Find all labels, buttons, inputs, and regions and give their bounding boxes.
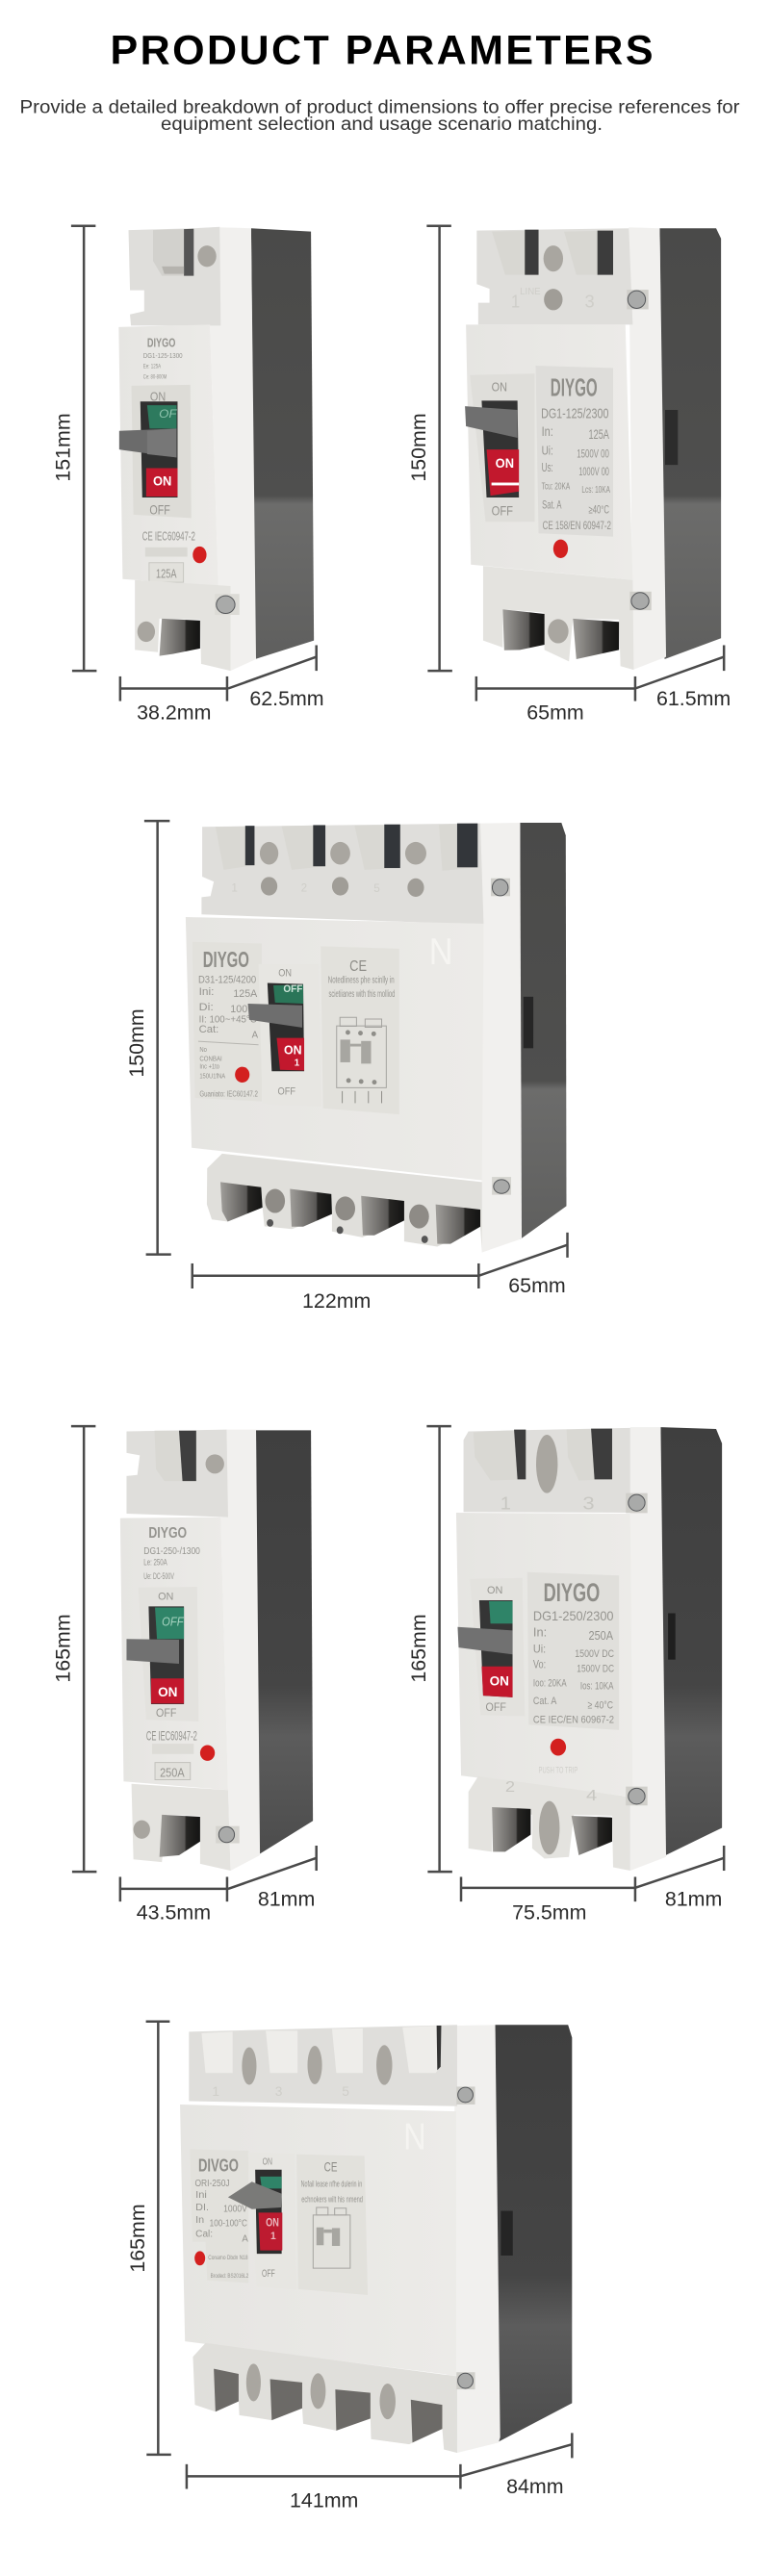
breaker: 1-pole 125A	[118, 227, 314, 671]
dimension: 81mm depth	[635, 1846, 724, 1888]
breaker: 2-pole 250A: 3	[582, 1492, 595, 1513]
nameplate: Ios: 10KA	[580, 1680, 614, 1692]
dimension: 150mm height	[144, 821, 171, 1255]
nameplate: DIYGO	[544, 1579, 600, 1608]
breaker: 2-pole 250A: 1	[500, 1492, 511, 1513]
switch: OFF	[162, 1616, 185, 1629]
left nameplate	[190, 2149, 249, 2283]
nameplate text: DIYGO	[148, 1524, 187, 1542]
right nameplate with wiring diagram	[321, 946, 399, 1114]
breaker: 2-pole 250A	[456, 1427, 722, 1871]
left nameplate: DI.	[195, 2203, 209, 2213]
switch	[465, 373, 534, 522]
nameplate: Ioo: 20KA	[533, 1677, 567, 1689]
dimension: 84mm depth	[460, 2433, 572, 2476]
switch: 1	[295, 1058, 300, 1069]
nameplate: In:	[542, 423, 553, 439]
left nameplate: 100-100°C	[210, 2218, 247, 2230]
left nameplate: No	[199, 1047, 207, 1054]
nameplate: DIYGO	[551, 373, 598, 401]
dimension: 150mm height	[426, 226, 452, 671]
nameplate: Ui:	[533, 1643, 546, 1656]
left nameplate: 150U1fNA	[199, 1073, 225, 1080]
left nameplate: 1000V	[223, 2204, 247, 2214]
switch	[228, 2153, 296, 2290]
labels: row 2 dimensions	[125, 1008, 566, 1313]
left nameplate: Guaniato: IEC60147.2	[199, 1089, 258, 1099]
switch	[457, 1578, 525, 1717]
left nameplate: Ini	[195, 2190, 207, 2201]
left nameplate: 100	[230, 1004, 247, 1015]
nameplate	[535, 366, 613, 537]
breaker: 1-pole 250A: CE IEC60947-2	[146, 1728, 197, 1744]
nameplate	[527, 1572, 619, 1730]
nameplate: Lcs: 10KA	[581, 485, 610, 496]
left nameplate: Cat:	[199, 1024, 218, 1035]
left nameplate: DIYGO	[203, 946, 249, 972]
labels: row 3 dimensions: 43.5mm	[137, 1901, 211, 1925]
labels: row 3 dimensions: 81mm	[665, 1887, 722, 1910]
subtitle text: Provide a detailed breakdown of product dimensions to offer precise references for	[19, 96, 740, 117]
labels: row 3 dimensions: 165mm	[51, 1614, 74, 1683]
dimension: 122mm width	[192, 1263, 478, 1288]
dimension: 61.5mm depth	[635, 645, 724, 688]
nameplate text: 250A	[160, 1767, 185, 1780]
breaker: 2-pole 250A: 4	[586, 1787, 597, 1804]
breaker: 2-pole 125A: LINE	[520, 287, 541, 297]
nameplate: 250A	[589, 1629, 613, 1643]
switch: ON	[158, 1685, 177, 1699]
right nameplate with wiring diagram: scietiianes with this molliod	[328, 989, 395, 1000]
nameplate text: DG1-125-1300	[143, 351, 183, 360]
nameplate: DG1-250/2300	[533, 1608, 614, 1623]
switch: ON	[278, 968, 292, 980]
right nameplate with wiring diagram: Notedliness phe scinlly in	[328, 975, 395, 986]
nameplate: Vo:	[533, 1658, 546, 1671]
nameplate: Sat. A	[542, 498, 562, 512]
dimension: 65mm depth	[478, 1233, 568, 1276]
breaker: 4-pole 125A	[186, 823, 566, 1253]
switch: OFF	[262, 2268, 275, 2280]
nameplate text: 125A	[156, 567, 177, 580]
breaker: 4-pole 125A: 2	[301, 880, 307, 894]
nameplate text	[143, 1524, 200, 1780]
breaker: 2-pole 250A: 2	[505, 1778, 515, 1796]
nameplate: ≥ 40°C	[588, 1698, 613, 1711]
labels: row 1 dimensions: 150mm	[407, 413, 430, 482]
nameplate: CE 158/EN 60947-2	[543, 519, 611, 532]
nameplate: CE IEC/EN 60967-2	[533, 1713, 614, 1725]
left nameplate: D31-125/4200	[198, 974, 256, 986]
switch: ON	[496, 455, 514, 471]
nameplate: DG1-125/2300	[541, 407, 608, 422]
labels: row 1 dimensions	[51, 413, 731, 725]
nameplate: Ui:	[542, 444, 553, 457]
switch	[119, 385, 192, 518]
nameplate: Us:	[542, 460, 553, 474]
labels: row 3 dimensions: 165mm	[407, 1614, 430, 1683]
labels: row 4 dimensions: 165mm	[126, 2204, 149, 2273]
right nameplate with wiring diagram: echnokers wilt his nmend	[301, 2195, 363, 2205]
breaker: 2-pole 125A	[465, 227, 721, 670]
right nameplate with wiring diagram	[296, 2155, 368, 2295]
dimension: 65mm width	[476, 676, 635, 701]
breaker: 2-pole 250A: PUSH TO TRIP	[539, 1766, 578, 1775]
panel: row 4 breaker	[146, 2022, 572, 2489]
breaker: 4-pole 250A: 1	[212, 2083, 219, 2099]
breaker: 4-pole 125A: 5	[373, 881, 380, 895]
labels: row 1 dimensions: 65mm	[526, 701, 584, 725]
switch: ON	[263, 2156, 272, 2167]
left nameplate: ORI-250J	[195, 2179, 230, 2189]
breaker: 4-pole 125A: 1	[231, 880, 238, 894]
nameplate: 1500V 00	[577, 447, 609, 460]
labels: row 3 dimensions	[51, 1614, 722, 1925]
nameplate: 125A	[589, 426, 609, 442]
nameplate text: Ee: 125A	[143, 364, 161, 370]
switch: ON	[492, 380, 507, 395]
switch: OFF	[492, 503, 513, 518]
subtitle text	[19, 96, 740, 135]
nameplate: In:	[533, 1626, 547, 1640]
left nameplate: A	[252, 1030, 259, 1041]
dimension: 151mm height	[71, 226, 96, 671]
switch: ON	[150, 390, 166, 403]
dimension: 81mm depth	[228, 1846, 317, 1889]
switch	[248, 964, 321, 1107]
left nameplate	[192, 942, 262, 1102]
left nameplate: In	[195, 2215, 204, 2226]
nameplate text: DG1-250-/1300	[143, 1545, 200, 1556]
nameplate: 1500V DC	[577, 1662, 614, 1674]
dimension: 165mm height	[71, 1426, 96, 1872]
labels: row 2 dimensions: 65mm	[508, 1274, 566, 1297]
breaker: 4-pole 250A: 5	[342, 2083, 349, 2099]
left nameplate: Inc +1to	[199, 1064, 219, 1071]
nameplate: Tcu: 20KA	[542, 482, 570, 492]
switch: OF	[159, 408, 177, 421]
nameplate text: CE IEC60947-2	[142, 529, 195, 543]
dimension: 165mm height	[146, 2022, 171, 2455]
right nameplate with wiring diagram: CE	[324, 2159, 338, 2175]
nameplate text: Ue: DC-500V	[143, 1572, 174, 1581]
title: PRODUCT PARAMETERS	[110, 27, 653, 73]
nameplate: Cat. A	[533, 1694, 557, 1706]
breaker: 4-pole 250A: N	[403, 2116, 426, 2158]
nameplate: ≥40°C	[589, 503, 609, 516]
labels: row 4 dimensions: 84mm	[506, 2475, 564, 2498]
switch: OFF	[283, 983, 303, 995]
labels: row 1 dimensions: 38.2mm	[137, 701, 211, 725]
dimension: 43.5mm width	[120, 1876, 227, 1901]
dimension: 62.5mm depth	[228, 645, 317, 688]
nameplate text: Ce: 80-800M	[143, 374, 167, 381]
subtitle text: equipment selection and usage scenario matching.	[161, 114, 603, 135]
labels: row 4 dimensions	[126, 2204, 564, 2512]
switch	[126, 1587, 198, 1722]
breaker: 1-pole 250A	[120, 1430, 313, 1871]
labels: row 4 dimensions: 141mm	[290, 2488, 358, 2512]
left nameplate: CONBAI	[199, 1056, 222, 1063]
breaker: 4-pole 125A: N	[429, 931, 452, 973]
left nameplate: II: 100~+45°C	[199, 1014, 257, 1026]
panel: row 3 breakers	[71, 1426, 724, 1901]
left nameplate: DIVGO	[198, 2155, 239, 2176]
left nameplate: Broded: BS2016L2	[211, 2273, 249, 2280]
labels: row 1 dimensions: 151mm	[51, 413, 74, 482]
switch: ON	[487, 1584, 502, 1596]
nameplate text	[142, 336, 195, 582]
labels: row 1 dimensions: 61.5mm	[656, 687, 731, 710]
right nameplate with wiring diagram: CE	[349, 958, 367, 975]
left nameplate: 125A	[233, 988, 258, 1000]
left nameplate: Conamo Dbdn N18	[208, 2255, 248, 2261]
breaker: 2-pole 125A: 3	[584, 293, 595, 312]
nameplate text: DIYGO	[147, 336, 175, 350]
left nameplate: Di:	[199, 1002, 214, 1013]
labels: row 3 dimensions: 81mm	[258, 1887, 315, 1910]
labels: row 1 dimensions: 62.5mm	[249, 687, 324, 710]
labels: row 2 dimensions: 122mm	[302, 1289, 371, 1313]
dimension: 38.2mm width	[120, 676, 227, 701]
switch: 1	[270, 2231, 276, 2242]
labels: row 2 dimensions: 150mm	[125, 1008, 148, 1078]
switch: OFF	[156, 1706, 176, 1720]
switch: OFF	[149, 502, 170, 517]
switch: ON	[284, 1043, 302, 1057]
switch: OFF	[278, 1085, 295, 1098]
left nameplate: Ini:	[199, 986, 214, 998]
switch: ON	[153, 473, 171, 488]
left nameplate: Cal:	[195, 2229, 213, 2239]
nameplate: 1000V 00	[578, 465, 609, 478]
switch: ON	[158, 1590, 173, 1602]
switch: ON	[490, 1673, 509, 1689]
right nameplate with wiring diagram: Nofail lease nfhe dulerin in	[301, 2179, 362, 2189]
nameplate text: Le: 250A	[143, 1558, 167, 1568]
breaker: 4-pole 250A: 3	[275, 2083, 283, 2099]
labels: row 3 dimensions: 75.5mm	[512, 1901, 586, 1925]
nameplate: 1500V DC	[575, 1646, 614, 1659]
switch: ON	[266, 2215, 279, 2230]
dimension: 141mm width	[187, 2464, 460, 2489]
left nameplate: A	[242, 2234, 248, 2245]
dimension: 75.5mm width	[461, 1876, 635, 1901]
panel: row 1 breakers	[71, 226, 724, 701]
dimension: 165mm height	[426, 1426, 452, 1872]
panel: row 2 breaker	[144, 821, 568, 1288]
breaker: 2-pole 125A: 1	[511, 293, 520, 312]
breaker: 4-pole 250A	[180, 2025, 572, 2453]
switch: OFF	[486, 1701, 506, 1714]
